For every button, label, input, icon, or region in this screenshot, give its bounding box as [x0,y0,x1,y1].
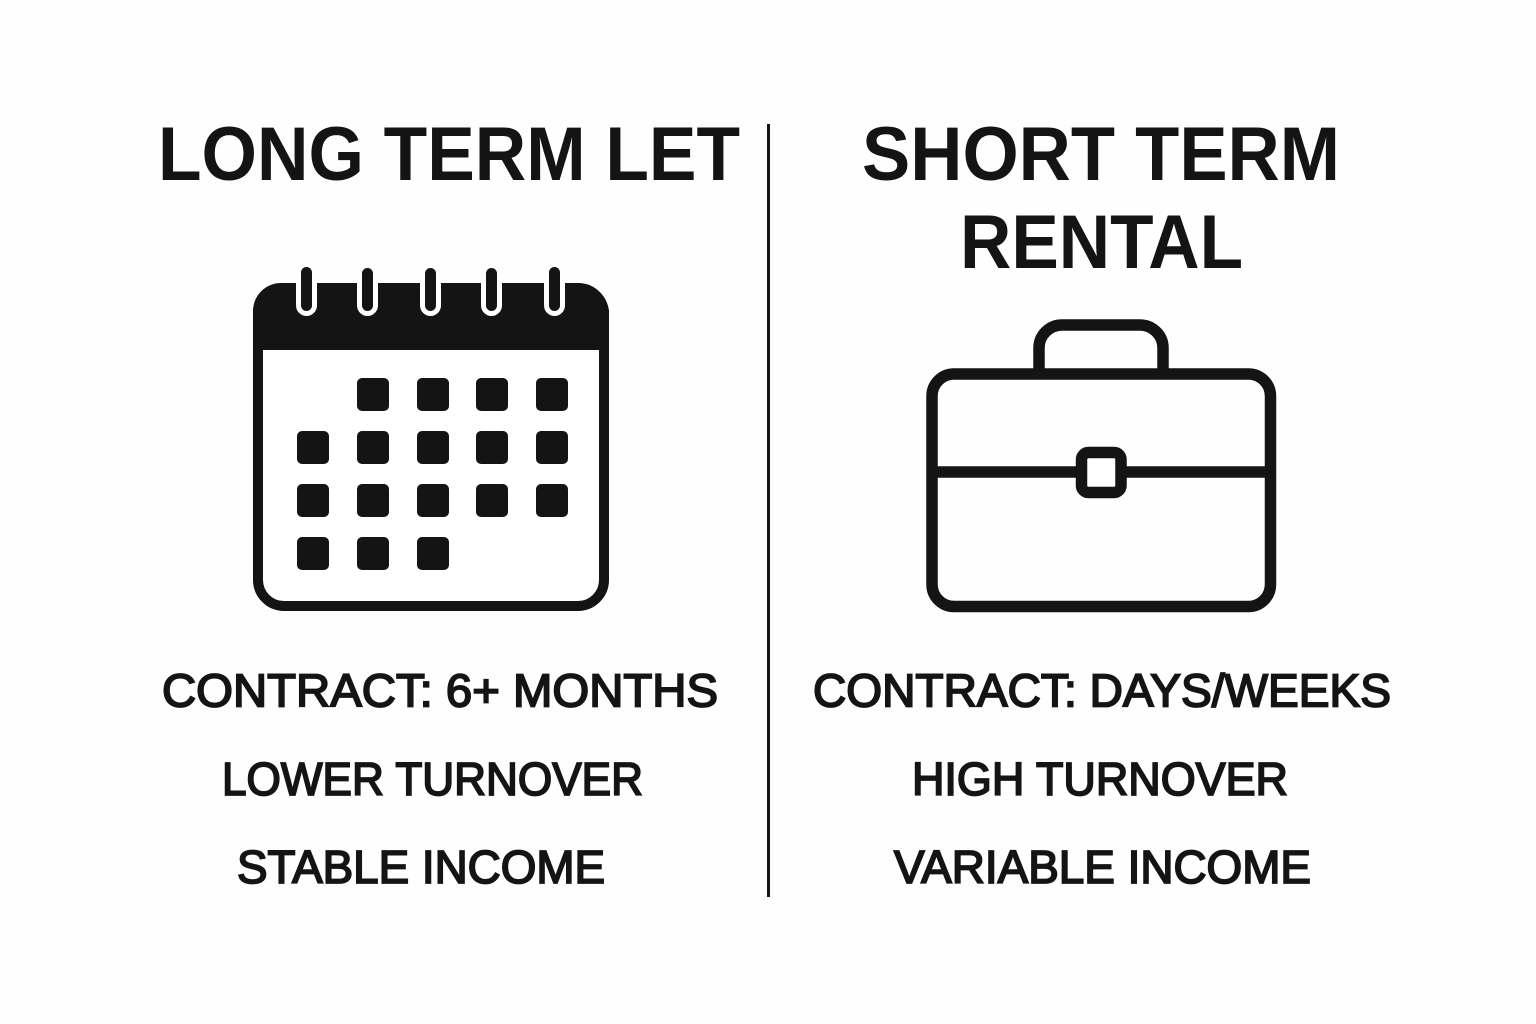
panel: long term let [158,112,740,893]
heading: short term rental: SHORT TERM [862,112,1340,197]
panel: short term rental [813,112,1391,893]
text: income: STABLE INCOME [237,841,605,893]
text: contract length: CONTRACT: 6+ MONTHS [162,664,718,716]
text: turnover: LOWER TURNOVER [222,753,643,805]
heading: short term rental: RENTAL [960,200,1243,285]
divider between columns [767,124,770,897]
icon: briefcase [932,325,1270,606]
icon: calendar [253,267,609,606]
heading: short term rental [862,112,1340,285]
heading: long term let: LONG TERM LET [158,112,740,197]
text: income: VARIABLE INCOME [894,841,1311,893]
text: contract length: CONTRACT: DAYS/WEEKS [813,664,1391,716]
text: turnover: HIGH TURNOVER [912,753,1288,805]
